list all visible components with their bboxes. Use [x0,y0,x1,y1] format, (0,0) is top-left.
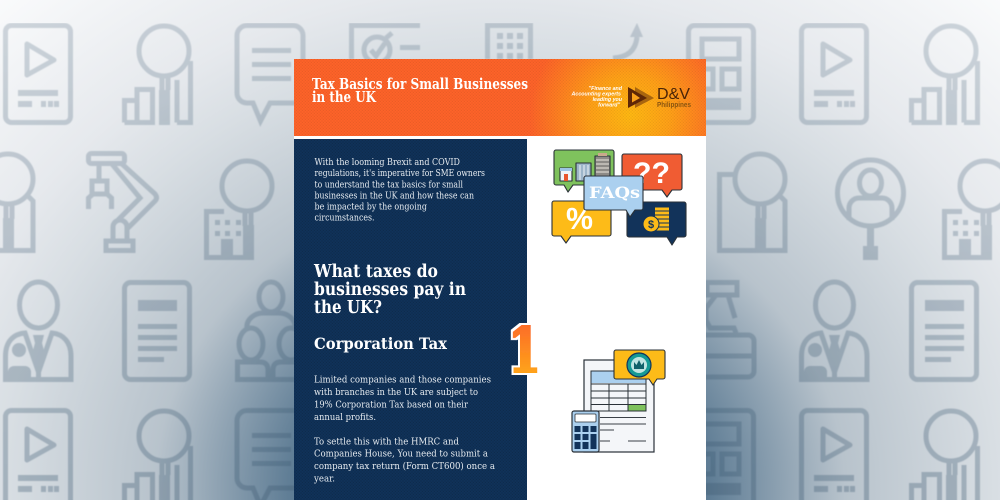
logo [571,86,691,109]
paragraph two: company tax return (Form CT600) once a [314,461,495,472]
tagline: Accounting experts [571,92,621,98]
subheading: Corporation Tax [314,334,448,353]
paragraph one: with branches in the UK are subject to [314,387,478,398]
paragraph two: To settle this with the HMRC and [314,436,459,447]
number 1: 1 [508,314,541,387]
bubble: FAQs: FAQs [589,183,640,202]
section heading: the UK? [314,298,382,318]
tagline: forward" [598,102,620,108]
white card [294,59,706,500]
paragraph two: year. [313,474,335,485]
bubble: buildings [554,150,614,192]
intro text: businesses in the UK and how these can [314,190,474,201]
intro text: be impacted by the ongoing [314,202,427,212]
tagline: "Finance and [589,86,623,92]
paragraph two: Companies House, You need to submit a [314,449,488,460]
logo name: D&V [657,86,691,103]
paragraph one: 19% Corporation Tax based on their [314,400,468,411]
bubble: percent: % [566,201,593,236]
illustration: FAQ speech bubbles [552,150,686,245]
illustration: tax return form with calculator [572,350,665,452]
bubble: coins: $ [648,219,654,231]
bubble: question marks: ?? [633,157,670,190]
form sheet [584,360,654,452]
navy text panel [294,139,527,500]
calculator [572,411,599,452]
tagline: leading you [593,97,623,103]
title: Tax Basics for Small Businesses [312,75,528,93]
header banner [294,59,706,136]
logo subname: Philippines [657,102,691,109]
intro text: to understand the tax basics for small [314,179,463,190]
paragraph one: Limited companies and those companies [314,375,491,386]
intro text: regulations, it's imperative for SME owners [314,168,485,179]
section heading: What taxes do [313,262,438,282]
HMRC speech bubble [614,350,665,385]
title: in the UK [312,88,377,106]
logo mark [628,87,654,108]
paragraph one: annual profits. [314,412,376,423]
intro text: circumstances. [314,213,375,224]
section heading: businesses pay in [314,280,466,300]
intro text: With the looming Brexit and COVID [314,157,460,168]
